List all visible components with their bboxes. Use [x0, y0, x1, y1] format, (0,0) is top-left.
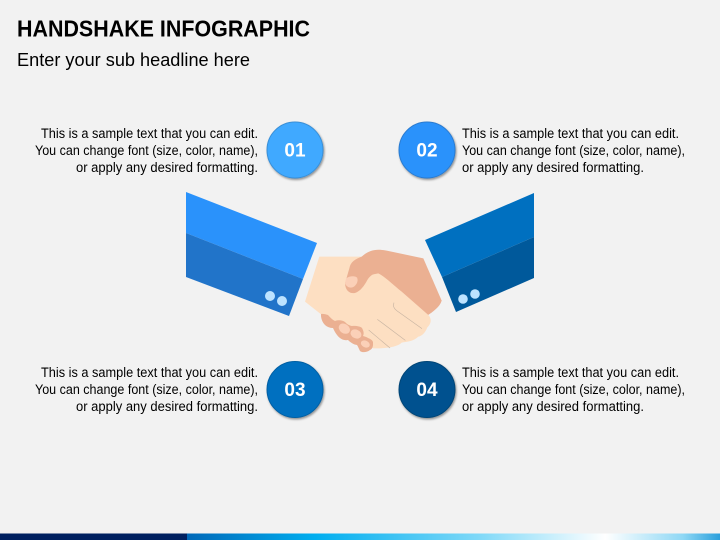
text block 04: [462, 365, 685, 414]
finger crease lines: [369, 303, 422, 348]
text block 03: This is a sample text that you can edit.: [41, 365, 258, 380]
text block 01: You can change font (size, color, name),: [35, 143, 258, 158]
right sleeve cuff: [425, 193, 534, 312]
text block 02: or apply any desired formatting.: [462, 160, 644, 175]
number badge 04: [399, 362, 455, 418]
subtitle: Enter your sub headline here: [17, 50, 250, 70]
number badge 04: 04: [416, 380, 438, 401]
left sleeve cuff: [186, 192, 317, 316]
text block 03: or apply any desired formatting.: [76, 399, 258, 414]
number badge 03: 03: [284, 380, 306, 401]
text block 02: [462, 126, 685, 175]
title: HANDSHAKE INFOGRAPHIC: [17, 16, 310, 42]
text block 04: or apply any desired formatting.: [462, 399, 644, 414]
thumb: [345, 253, 390, 293]
text block 02: This is a sample text that you can edit.: [462, 126, 679, 141]
text block 01: This is a sample text that you can edit.: [41, 126, 258, 141]
lower fingers: [321, 314, 373, 352]
number badge 02: [399, 122, 455, 178]
text block 04: This is a sample text that you can edit.: [462, 365, 679, 380]
icon: handshake: [305, 250, 442, 352]
text block 01: or apply any desired formatting.: [76, 160, 258, 175]
number badge 03: [267, 362, 323, 418]
text block 01: [35, 126, 258, 175]
number badge 01: [267, 122, 323, 178]
darker hand: [362, 250, 442, 316]
number badge 02: 02: [416, 141, 438, 162]
text block 02: You can change font (size, color, name),: [462, 143, 685, 158]
thumb nail: [345, 276, 358, 288]
text block 03: You can change font (size, color, name),: [35, 382, 258, 397]
number badge 01: 01: [284, 141, 306, 162]
bottom bar: [0, 534, 720, 540]
lighter hand: [305, 257, 431, 348]
text block 04: You can change font (size, color, name),: [462, 382, 685, 397]
finger nails: [337, 321, 352, 336]
text block 03: [35, 365, 258, 414]
